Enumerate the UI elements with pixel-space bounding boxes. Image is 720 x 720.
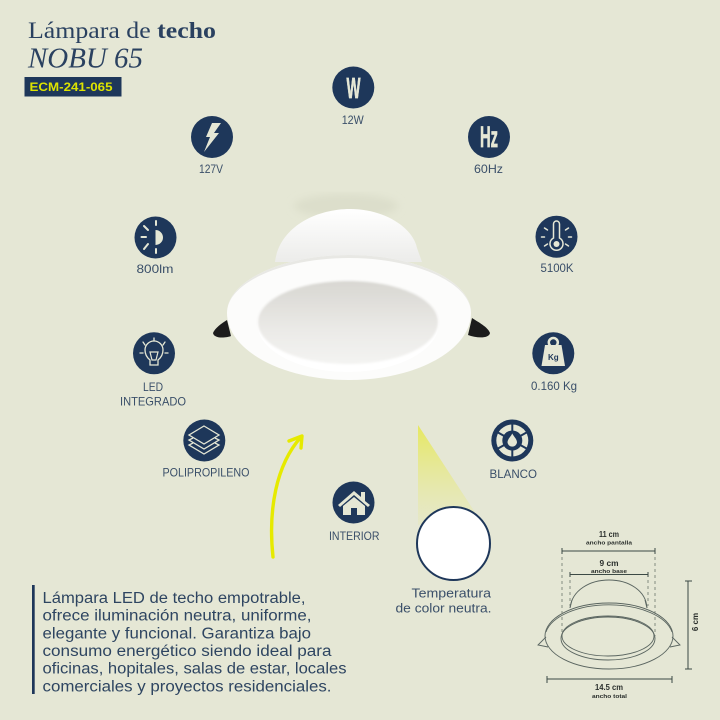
icon: LED bulb [133, 332, 175, 374]
icon: frequency: Hz [480, 121, 498, 154]
lamp outline [538, 580, 680, 669]
label: weight value: 0.160 Kg [531, 379, 577, 393]
description text block: consumo energético siendo ideal para [42, 643, 332, 660]
icon: frequency [468, 116, 510, 158]
label: blanco: BLANCO [490, 467, 537, 481]
icon: thermometer [536, 216, 578, 258]
caption: color temperature: de color neutra. [396, 601, 492, 616]
label: LED integrado [120, 380, 186, 408]
icon: weight: Kg [548, 353, 559, 362]
title: Lámpara de techo [28, 18, 216, 43]
icon: color wheel [491, 420, 533, 462]
description text block: comerciales y proyectos residenciales. [42, 678, 332, 696]
caption: color temperature [396, 586, 492, 616]
dimension labels: 9 cm [600, 559, 618, 568]
label: polipropileno: POLIPROPILENO [162, 466, 250, 480]
title: NOBU 65 [27, 44, 143, 74]
dimension labels: 11 cm [599, 530, 619, 539]
product code badge: ECM-241-065 [30, 80, 113, 94]
title [27, 18, 216, 74]
dimension labels: 14.5 cm [595, 683, 623, 692]
icon: material layers [183, 420, 225, 462]
dimension lines [547, 548, 692, 683]
icon: weight [532, 332, 574, 374]
label: 127V: 127V [199, 162, 223, 176]
label: 12W: 12W [342, 113, 364, 127]
description text block: ofrece iluminación neutra, uniforme, [42, 608, 312, 624]
product code badge [24, 77, 122, 96]
dimension labels [586, 530, 700, 700]
caption: color temperature: Temperatura [412, 586, 492, 600]
label: 800lm: 800lm [136, 262, 174, 276]
color temperature swatch [417, 507, 490, 580]
icon: interior house [332, 482, 374, 524]
light beam [418, 425, 478, 525]
dimension labels: 6 cm [691, 613, 700, 631]
description text block: oficinas, hopitales, salas de estar, locales [42, 660, 347, 678]
dimensions diagram [538, 530, 700, 700]
label: LED integrado: LED [143, 380, 163, 394]
description text block [32, 585, 347, 696]
dimension labels: ancho total [592, 694, 628, 700]
arrow [272, 436, 302, 557]
label: 5100K: 5100K [540, 261, 574, 275]
icon: voltage bolt [191, 116, 233, 158]
dimension labels: ancho base [591, 569, 627, 575]
description text block: elegante y funcional. Garantiza bajo [42, 626, 311, 642]
icon: watts [332, 66, 374, 108]
dimension labels: ancho pantalla [586, 540, 633, 546]
product photo: ceiling lamp [213, 194, 490, 380]
label: LED integrado: INTEGRADO [120, 394, 186, 408]
icon: lumens [134, 216, 176, 258]
label: interior: INTERIOR [329, 529, 380, 543]
icon: watts: W [346, 73, 361, 105]
description text block: Lámpara LED de techo empotrable, [42, 590, 306, 607]
label: 60Hz: 60Hz [474, 162, 503, 176]
